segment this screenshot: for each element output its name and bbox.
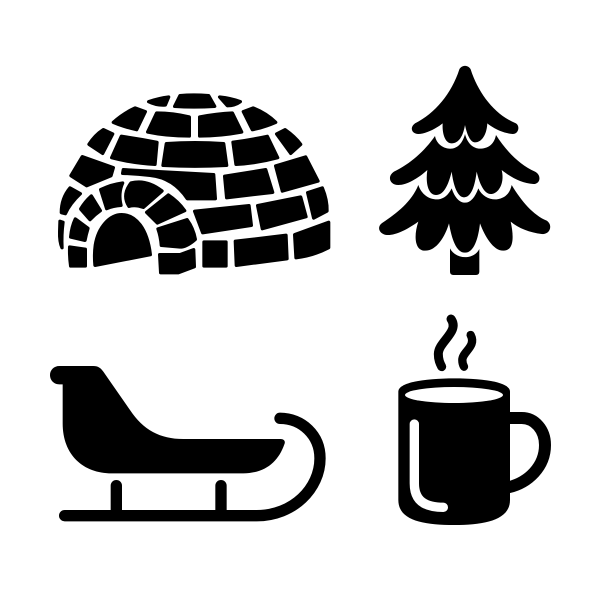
- icon: fir tree: [379, 66, 550, 275]
- steam: [438, 319, 453, 367]
- sled runner: [65, 418, 320, 516]
- mug highlight: [414, 424, 443, 507]
- steam small: [462, 335, 472, 367]
- mug handle: [508, 418, 545, 487]
- sled struts: [116, 486, 221, 515]
- icon: sled: [50, 366, 320, 516]
- icon: hot mug: [398, 319, 545, 525]
- mug opening: [405, 387, 503, 403]
- sled body: [50, 366, 285, 473]
- mug body: [398, 378, 510, 525]
- icon: igloo: [60, 95, 329, 273]
